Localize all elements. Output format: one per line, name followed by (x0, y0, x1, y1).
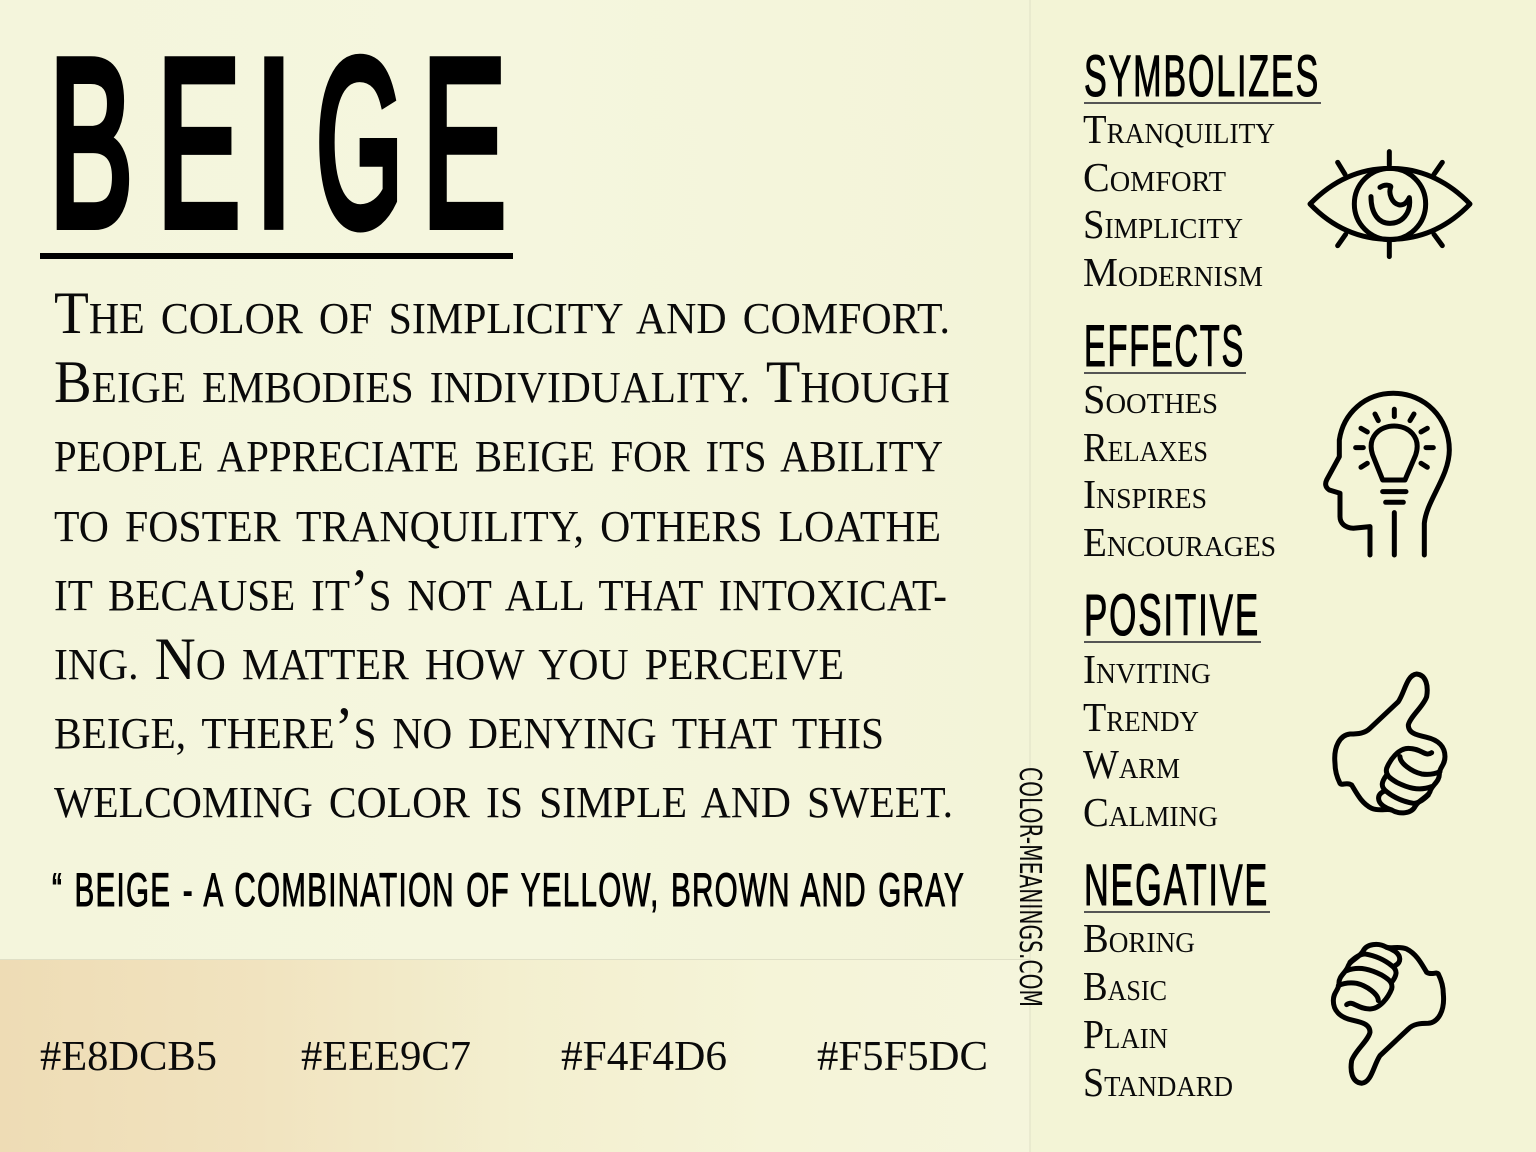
text block: description: PEOPLE APPRECIATE BEIGE FOR ITS ABILITY (54, 432, 943, 481)
section: symbolizes (1083, 44, 1321, 295)
title underline (40, 253, 513, 259)
list: symbolizes: COMFORT (1083, 154, 1226, 200)
title: I (254, 9, 294, 276)
text block: description: IT BECAUSE IT’S NOT ALL THAT INTOXICAT- (54, 557, 947, 623)
text block: description (54, 280, 953, 827)
list: negative: STANDARD (1083, 1059, 1233, 1105)
icon: thumbs down (1333, 944, 1444, 1083)
list: symbolizes: SIMPLICITY (1083, 201, 1243, 247)
list: effects (1083, 376, 1276, 565)
section: positive (1083, 583, 1261, 835)
hex codes: #F4F4D6 (561, 1034, 727, 1080)
website credit: COLOR-MEANINGS.COM (1012, 767, 1047, 1007)
hex codes: #E8DCB5 (40, 1034, 217, 1080)
text block: description: BEIGE EMBODIES INDIVIDUALITY. THOUGH (54, 349, 950, 415)
title: G (316, 11, 403, 276)
hex codes (40, 1034, 988, 1080)
section: effects (1083, 314, 1276, 565)
list: symbolizes (1083, 106, 1275, 295)
text block: description: THE COLOR OF SIMPLICITY AND COMFORT. (54, 280, 950, 346)
list: effects: SOOTHES (1083, 376, 1218, 422)
panel: meanings sidebar (1030, 0, 1536, 1152)
list: symbolizes: MODERNISM (1083, 249, 1263, 295)
title: E (422, 11, 506, 276)
icon: thumbs up (1335, 674, 1445, 813)
list: negative (1083, 915, 1233, 1105)
text block: description: BEIGE, THERE’S NO DENYING THAT THIS (54, 695, 884, 761)
list: negative: BORING (1083, 915, 1195, 961)
section: negative (1083, 853, 1270, 1105)
list: negative: PLAIN (1083, 1011, 1168, 1057)
heading: positive: POSITIVE (1084, 583, 1260, 648)
list: positive: CALMING (1083, 789, 1218, 835)
text block: description: ING. NO MATTER HOW YOU PERCEIVE (54, 626, 844, 692)
list: effects: RELAXES (1083, 424, 1208, 470)
list: effects: ENCOURAGES (1083, 519, 1276, 565)
panel: colour swatch strip (0, 960, 1030, 1152)
text block: description: WELCOMING COLOR IS SIMPLE AND SWEET. (54, 778, 953, 827)
list: negative: BASIC (1083, 963, 1167, 1009)
list: symbolizes: TRANQUILITY (1083, 106, 1275, 152)
icon: eye (1310, 152, 1470, 257)
list: effects: INSPIRES (1083, 471, 1207, 517)
quote line: “ BEIGE - A COMBINATION OF YELLOW, BROWN AND GRAY (52, 863, 965, 916)
hex codes: #EEE9C7 (301, 1034, 471, 1080)
list: positive: WARM (1083, 741, 1180, 787)
list: positive: TRENDY (1083, 694, 1199, 740)
title (49, 9, 506, 276)
title: B (49, 11, 133, 276)
hex codes: #F5F5DC (817, 1034, 988, 1080)
title: E (157, 11, 240, 276)
list: positive: INVITING (1083, 646, 1211, 692)
panel: main description (0, 0, 1030, 960)
icon: head with light bulb (1326, 393, 1449, 555)
heading: negative: NEGATIVE (1084, 853, 1269, 918)
text block: description: TO FOSTER TRANQUILITY, OTHERS LOATHE (54, 502, 941, 551)
heading: symbolizes: SYMBOLIZES (1084, 44, 1320, 109)
heading: effects: EFFECTS (1084, 314, 1245, 379)
list: positive (1083, 646, 1218, 835)
